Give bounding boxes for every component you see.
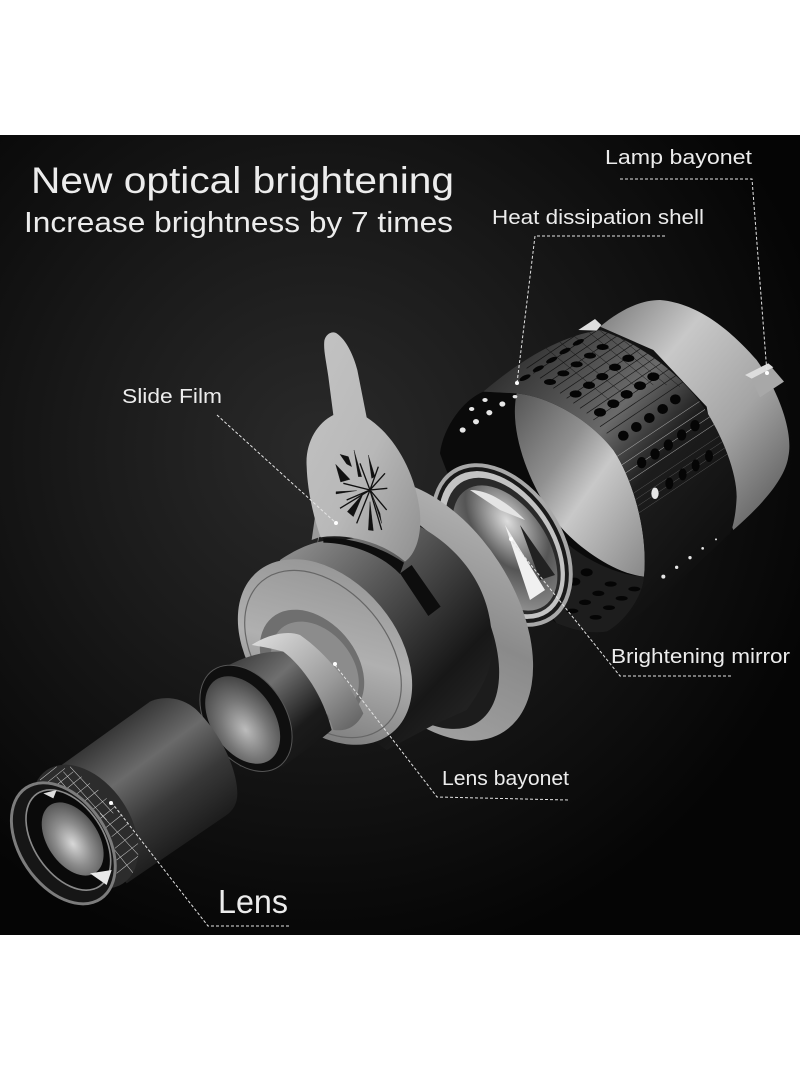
lens stage tube bbox=[203, 633, 363, 767]
exploded product illustration bbox=[0, 300, 789, 925]
band holes bbox=[519, 338, 713, 620]
callout line: brightening mirror bbox=[511, 540, 731, 676]
infographic canvas bbox=[0, 135, 800, 935]
heat dissipation shell bbox=[440, 300, 789, 632]
label: lamp bayonet: Lamp bayonet bbox=[605, 147, 753, 169]
label: heat dissipation shell: Heat dissipation shell bbox=[492, 207, 704, 229]
silver rear cylinder bbox=[600, 300, 789, 530]
silver collar bbox=[252, 633, 363, 730]
callout line: slide film bbox=[217, 415, 336, 523]
lens body bbox=[50, 698, 237, 883]
label: slide film: Slide Film bbox=[122, 386, 222, 408]
barrel slot bbox=[400, 565, 441, 616]
label: brightening mirror: Brightening mirror bbox=[611, 646, 790, 668]
callout line: lens bbox=[112, 803, 289, 926]
dark tube bbox=[203, 652, 332, 767]
bayonet tab rear bbox=[578, 319, 601, 331]
shell opening bbox=[440, 392, 645, 632]
knurled ring bbox=[9, 745, 161, 908]
callout lines bbox=[112, 179, 767, 926]
lower perforated inner wall bbox=[540, 543, 644, 632]
rear flange inner bbox=[280, 470, 536, 760]
slide film bbox=[307, 332, 420, 574]
callout dots bbox=[109, 371, 769, 805]
title: New optical brightening bbox=[31, 160, 454, 201]
callout line: lamp bayonet bbox=[620, 179, 767, 373]
callout line: lens bayonet bbox=[335, 665, 568, 800]
film starburst pattern bbox=[336, 450, 387, 531]
callout line: heat dissipation shell bbox=[517, 236, 665, 383]
dark panel bbox=[0, 135, 800, 935]
label: lens: Lens bbox=[218, 883, 288, 920]
lamp bayonet tab bbox=[745, 363, 784, 397]
light through holes bbox=[460, 395, 717, 579]
film shadow on barrel bbox=[323, 538, 404, 574]
inner silver wall bbox=[515, 393, 645, 577]
subtitle: Increase brightness by 7 times bbox=[24, 207, 453, 239]
rear flange ring bbox=[272, 440, 578, 780]
zoom lens bbox=[10, 698, 238, 906]
lens front rim bbox=[0, 762, 139, 925]
front flange bbox=[202, 525, 448, 779]
central barrel bbox=[280, 527, 492, 750]
brightening mirror bbox=[402, 437, 602, 653]
lens stage bbox=[181, 648, 311, 789]
band grooves bbox=[526, 330, 728, 513]
lens glass bbox=[29, 791, 116, 887]
label: lens bayonet: Lens bayonet bbox=[442, 768, 569, 790]
black perforated band bbox=[483, 330, 737, 632]
